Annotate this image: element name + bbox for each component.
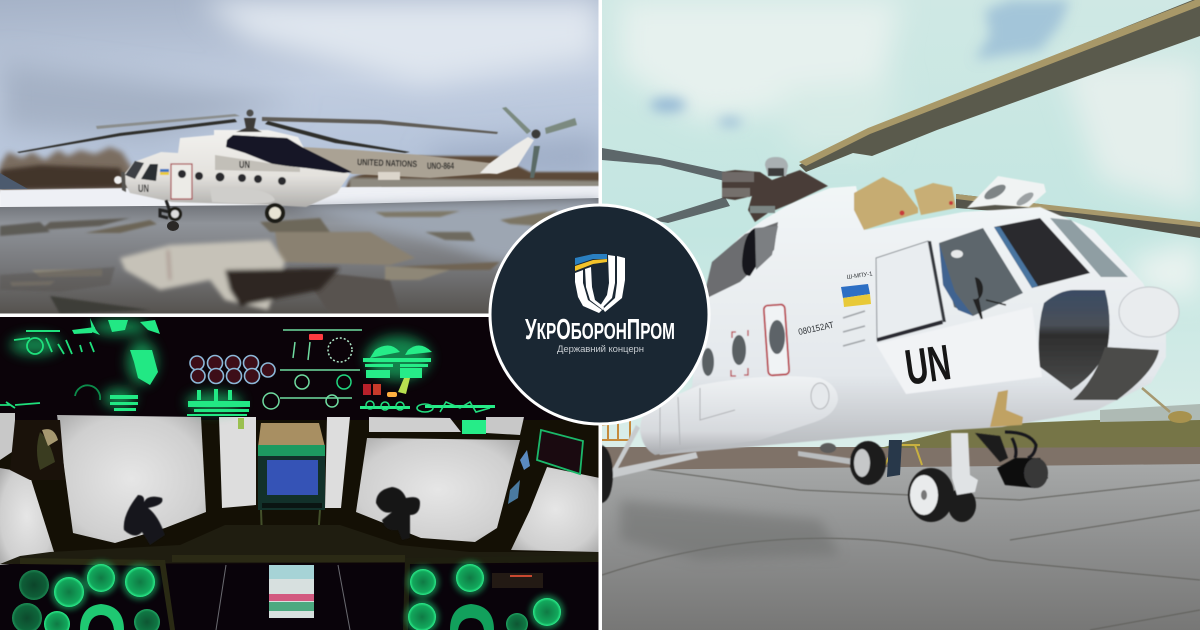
clouds bbox=[620, 0, 1200, 300]
nose dome bbox=[1119, 287, 1179, 337]
blue glass strips bbox=[520, 450, 530, 470]
overhead left green labels bbox=[0, 331, 100, 408]
front blades bbox=[17, 119, 237, 153]
wet apron bbox=[0, 198, 600, 314]
company name: УКРОБОРОНПРОМ bbox=[525, 314, 675, 346]
company subtitle: Державний концерн bbox=[557, 344, 644, 355]
pale water on right bbox=[290, 200, 600, 262]
fuel tank bbox=[211, 193, 275, 204]
left strut bbox=[612, 425, 698, 478]
lower dark panel bbox=[0, 565, 600, 630]
canvas covers bbox=[854, 177, 918, 230]
lower chin window bbox=[1073, 347, 1159, 400]
strut bbox=[951, 433, 978, 495]
apron patches bbox=[0, 210, 558, 314]
nose chin window bbox=[1039, 290, 1110, 390]
blue sky patches bbox=[650, 0, 1070, 126]
white window curtains bbox=[0, 413, 600, 565]
overhead right green switch bank bbox=[360, 345, 495, 434]
round window with red frame bbox=[764, 304, 789, 376]
top hatch bbox=[967, 176, 1046, 208]
side helicopter bbox=[17, 107, 577, 223]
shield emblem bbox=[575, 254, 625, 313]
front wheel far bbox=[948, 488, 976, 522]
tail box bbox=[378, 172, 400, 180]
glare shield bbox=[0, 525, 600, 564]
porthole windows bbox=[178, 170, 286, 185]
paper checklist bbox=[269, 565, 314, 618]
flag bbox=[160, 169, 169, 172]
panel: helicopter side view on wet apron bbox=[0, 0, 600, 314]
orange stands background bbox=[602, 420, 922, 465]
door bbox=[171, 164, 192, 199]
cabin door bbox=[876, 241, 943, 340]
cockpit window bbox=[994, 218, 1090, 288]
cockpit windows bbox=[125, 161, 144, 179]
fold lines bbox=[660, 388, 735, 450]
window frame band bbox=[0, 420, 600, 560]
rear main wheel bbox=[850, 441, 886, 485]
main wheel bbox=[265, 203, 285, 223]
coloured switch lamps bbox=[238, 378, 410, 429]
serial number: 080152АТ bbox=[797, 320, 835, 337]
pitot boot far right bbox=[1142, 388, 1192, 423]
fuselage bbox=[640, 176, 1179, 455]
person legs bbox=[887, 440, 902, 477]
panel: UN helicopter close-up bbox=[602, 0, 1200, 630]
tail boom bbox=[302, 147, 497, 178]
left main blade bbox=[602, 148, 725, 181]
right fan silhouette bbox=[376, 487, 420, 540]
warning lamp red bbox=[309, 334, 323, 340]
fuel tank bbox=[640, 376, 838, 455]
lower overhead symbols bbox=[366, 401, 490, 412]
nose wheel bbox=[160, 200, 170, 218]
upper main blade bbox=[799, 0, 1200, 172]
rotor hub bbox=[236, 118, 262, 132]
model label: Ш-МПУ-1 bbox=[846, 271, 874, 281]
black searchlight drum bbox=[997, 458, 1048, 488]
UN lettering: UN bbox=[902, 334, 954, 396]
lower left blade bbox=[652, 197, 730, 223]
overhead instrument glow bbox=[10, 319, 430, 412]
UN panel bbox=[876, 307, 1042, 394]
tail rotor bbox=[502, 107, 577, 178]
distant berm bbox=[345, 156, 600, 190]
red corner marks bbox=[731, 330, 748, 376]
centre cords bbox=[216, 565, 350, 630]
boom lettering: UNITED NATIONS bbox=[357, 157, 417, 169]
centre overhead gauges bbox=[263, 330, 362, 409]
round window rear bbox=[702, 348, 714, 376]
annunciator ring cluster bbox=[190, 356, 275, 384]
wheel reflection bbox=[167, 221, 179, 231]
snow band bbox=[0, 186, 600, 207]
mid strut bbox=[798, 451, 862, 466]
grass and tarmac background bbox=[602, 447, 1200, 477]
side window bbox=[939, 228, 1023, 316]
clouds bbox=[0, 0, 600, 175]
Ukrainian flag bbox=[841, 284, 871, 307]
badge circle bbox=[490, 205, 709, 424]
round window middle bbox=[732, 335, 746, 365]
side UN: UN bbox=[239, 160, 250, 171]
right blade far bbox=[956, 194, 1200, 238]
instrument gauges bbox=[12, 561, 564, 630]
sky bbox=[0, 0, 600, 190]
panel: illuminated cockpit interior bbox=[0, 317, 600, 630]
engine side band bbox=[215, 155, 300, 172]
logo badge bbox=[490, 205, 709, 424]
monitor with mount bbox=[258, 423, 325, 538]
landing gear bbox=[602, 425, 1048, 522]
front wheel near bbox=[908, 468, 954, 522]
treeline bbox=[0, 147, 132, 190]
vent lines bbox=[843, 311, 865, 346]
reflection of helicopter bbox=[120, 240, 340, 310]
front window bbox=[1050, 218, 1128, 277]
boot on strut bbox=[990, 390, 1023, 427]
dark cabin background bbox=[0, 317, 598, 565]
rear rotor blades bbox=[96, 114, 240, 129]
engine cowling bbox=[703, 222, 778, 300]
concrete cracks bbox=[602, 468, 1200, 630]
sky bbox=[602, 0, 1200, 470]
rotor hub bbox=[722, 157, 828, 222]
nose UN: UN bbox=[138, 183, 149, 195]
left fan silhouette bbox=[124, 495, 165, 545]
black rotor cover bbox=[226, 135, 352, 173]
mirror bbox=[974, 278, 1006, 325]
fuselage bbox=[122, 130, 350, 207]
tail pylon bbox=[480, 137, 534, 174]
nose bbox=[114, 176, 122, 184]
boom registration: UNO-864 bbox=[427, 161, 454, 171]
pillar with hanging equipment bbox=[10, 420, 65, 480]
right panel box bbox=[537, 430, 583, 474]
